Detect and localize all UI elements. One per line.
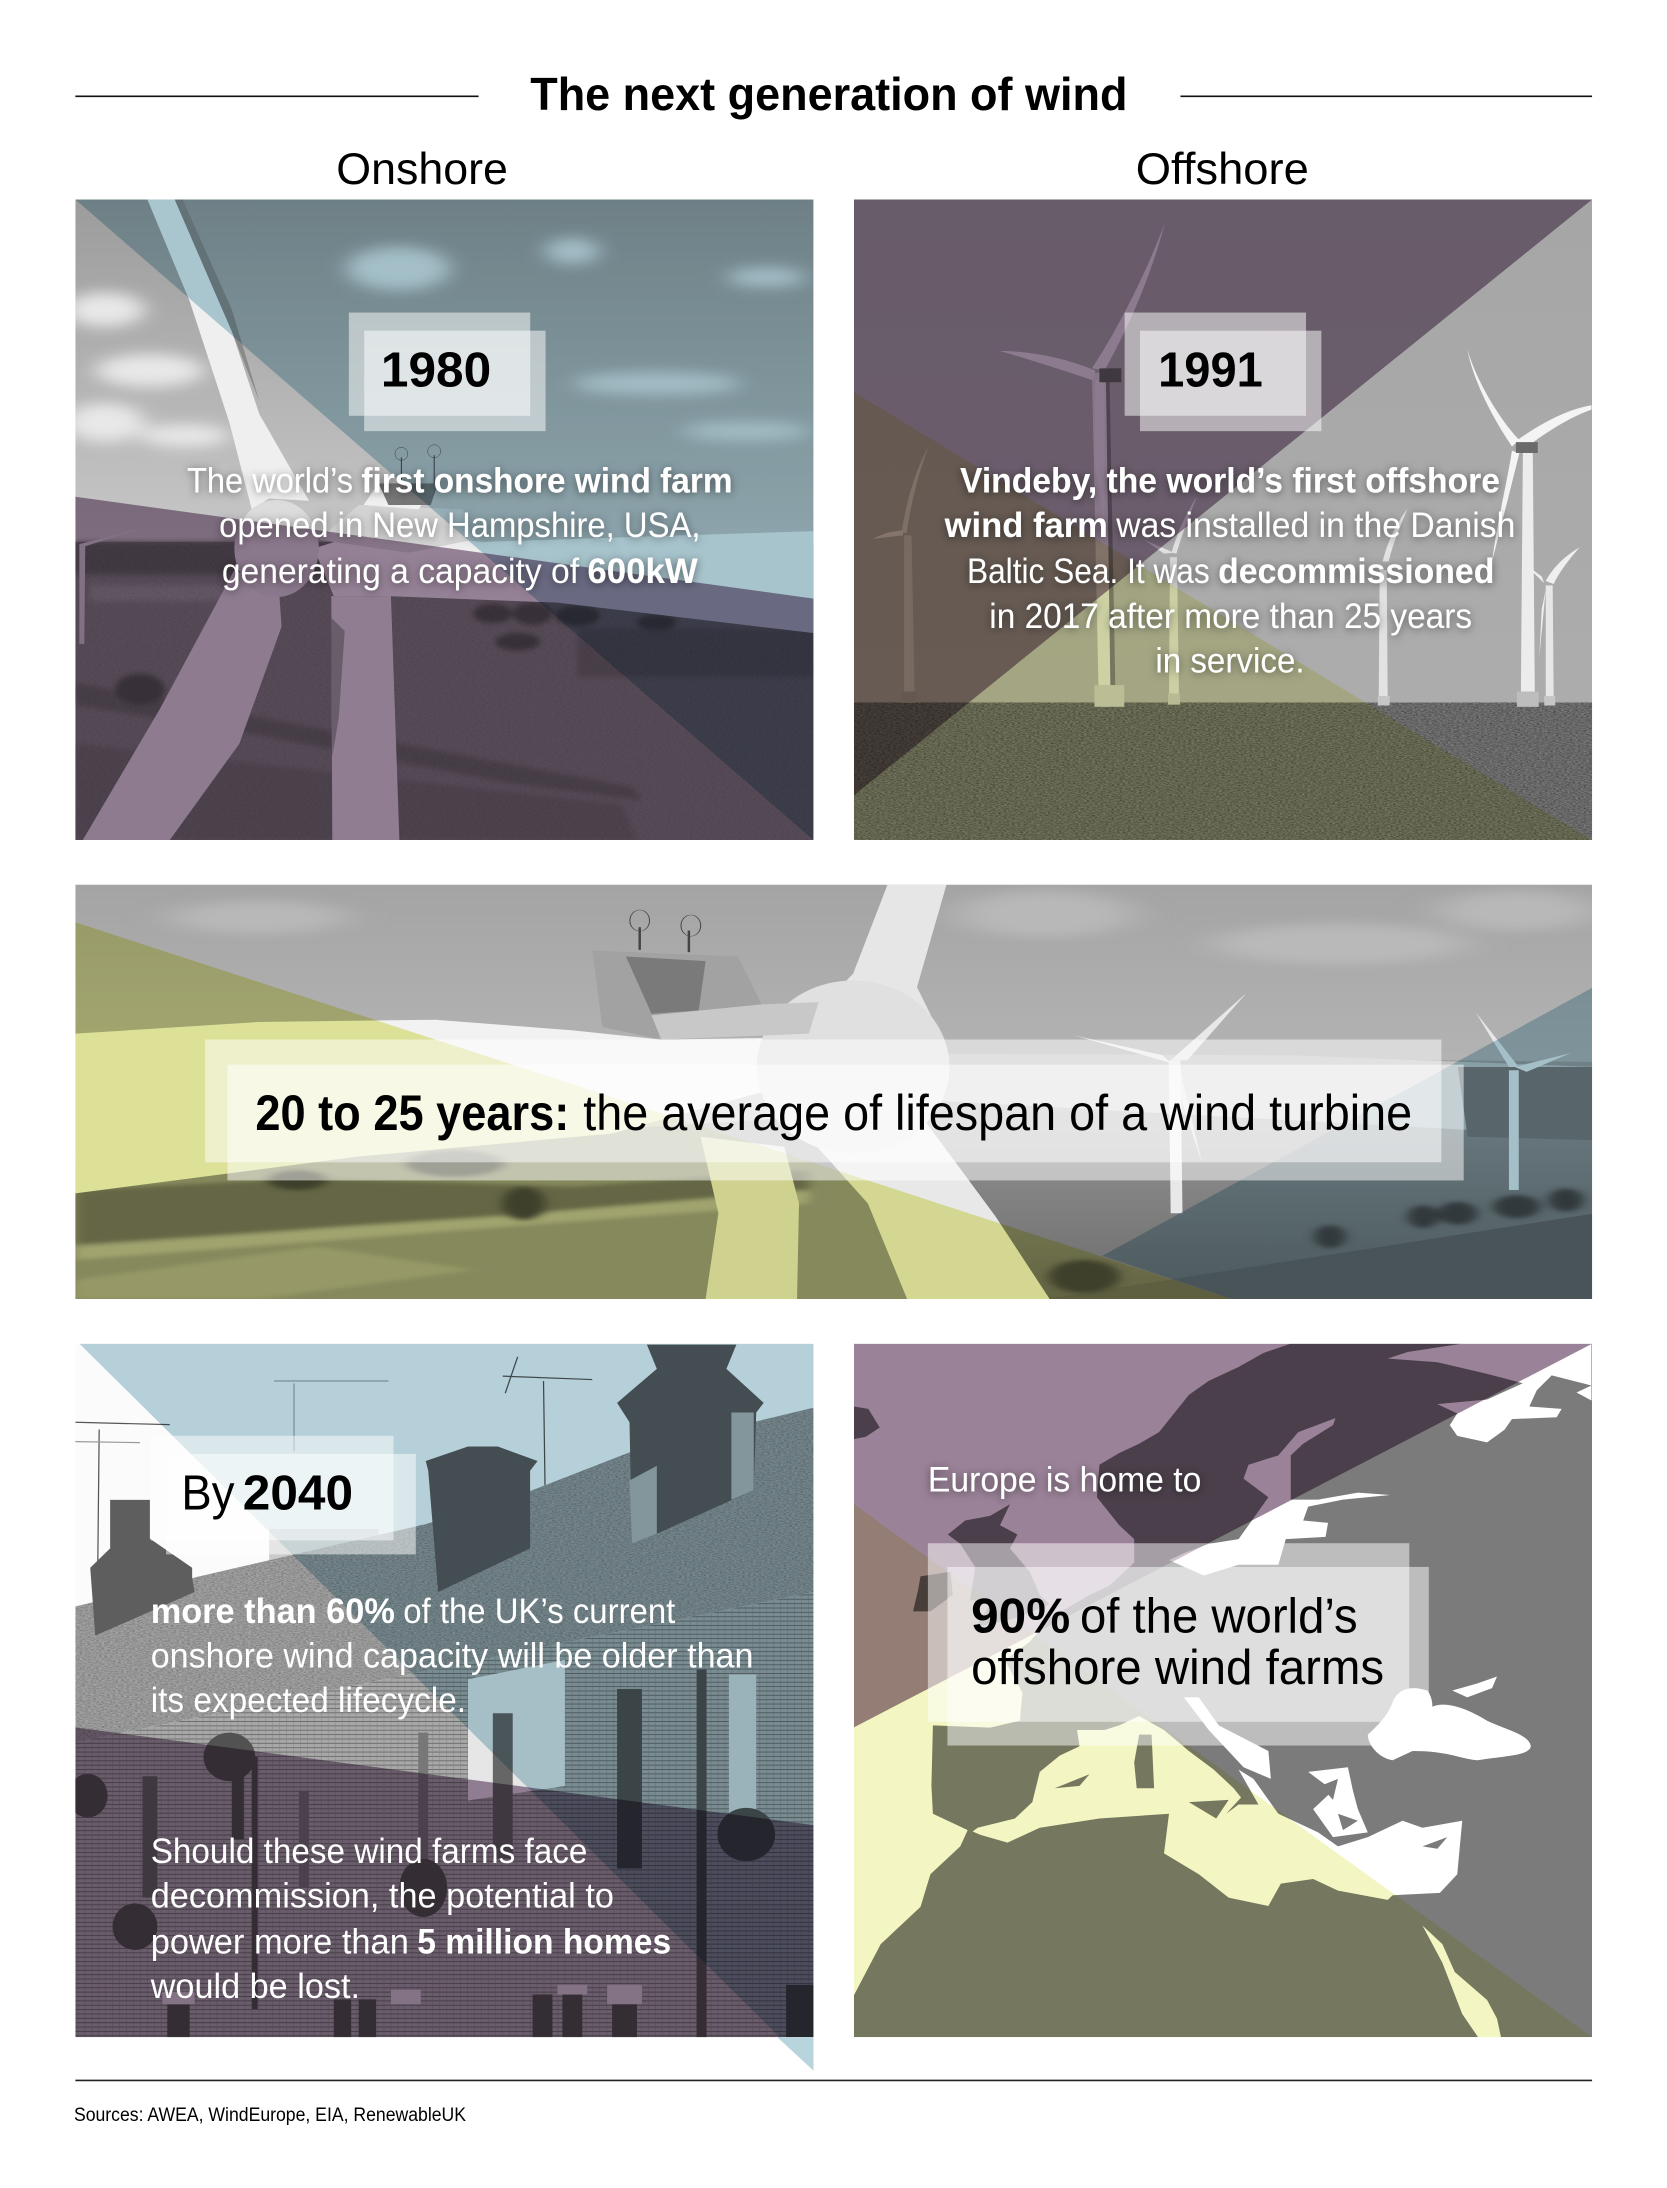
year box 1980 xyxy=(349,313,546,431)
text box: 90 percent: 90% xyxy=(971,1590,1070,1644)
year box by 2040: By xyxy=(181,1467,235,1521)
text: offshore fact: in service. xyxy=(1155,641,1305,681)
text: onshore fact: generating a capacity of xyxy=(222,551,579,591)
map: Europe with colour overlays xyxy=(854,1344,1592,2037)
panel: lifespan banner xyxy=(75,885,1595,1299)
photo: turbine close-up with colour overlays xyxy=(75,885,1595,1299)
text: capacity fact: more than 60% xyxy=(151,1591,395,1631)
text: offshore fact: was installed in the Danish xyxy=(1115,505,1515,545)
text: offshore fact xyxy=(944,461,1515,681)
text: homes fact: 5 million homes xyxy=(417,1921,671,1961)
title: The next generation of wind xyxy=(530,68,1127,120)
panel: by 2040 xyxy=(68,1344,813,2071)
year box 1980: 1980 xyxy=(381,344,491,398)
year box 1991: 1991 xyxy=(1158,344,1263,398)
text: Europe is home to: Europe is home to xyxy=(928,1460,1201,1500)
text: offshore fact: Baltic Sea. It was xyxy=(967,551,1210,591)
text box: lifespan: the average of lifespan of a wind turbine xyxy=(583,1085,1412,1141)
panel: offshore 1991 xyxy=(854,200,1592,841)
text: homes fact: decommission, the potential to xyxy=(151,1875,614,1915)
text box: 90 percent: of the world’s xyxy=(1080,1590,1358,1644)
sources: Sources: AWEA, WindEurope, EIA, RenewableUK xyxy=(74,2104,466,2126)
heading: Offshore: Offshore xyxy=(1136,145,1309,194)
panel: Europe map xyxy=(854,1344,1592,2037)
overlay: purple triangle xyxy=(854,200,1592,795)
text: homes fact: Should these wind farms face xyxy=(151,1831,587,1871)
overlay: yellow triangle xyxy=(854,1504,1592,2037)
year box by 2040: 2040 xyxy=(243,1467,353,1521)
text: onshore fact: The world’s xyxy=(187,461,353,501)
text: homes fact: would be lost. xyxy=(150,1966,360,2006)
text: onshore fact xyxy=(187,461,733,591)
panel: onshore 1980 xyxy=(65,200,813,846)
text: onshore fact: 600kW xyxy=(587,551,698,591)
heading: Onshore: Onshore xyxy=(336,145,508,194)
text box: 90 percent: offshore wind farms xyxy=(971,1641,1384,1695)
overlay: blue triangle xyxy=(75,200,813,840)
text box: lifespan xyxy=(205,1040,1464,1180)
text: offshore fact: wind farm xyxy=(944,505,1108,545)
text: offshore fact: Vindeby, the world’s first offshore xyxy=(960,461,1500,501)
text box: lifespan: 20 to 25 years: xyxy=(255,1085,569,1141)
overlay: blue triangle tail below photo xyxy=(777,2037,813,2071)
text box: 90 percent xyxy=(928,1543,1429,1746)
text: homes fact xyxy=(150,1831,671,2006)
text: onshore fact: opened in New Hampshire, USA, xyxy=(219,505,700,545)
text: homes fact: power more than xyxy=(151,1921,409,1961)
text: capacity fact: its expected lifecycle. xyxy=(151,1680,466,1720)
overlay: purple triangle xyxy=(854,1344,1592,1727)
year box 1991 xyxy=(1125,313,1321,431)
text: capacity fact xyxy=(151,1591,753,1720)
text: capacity fact: onshore wind capacity will be older than xyxy=(151,1635,753,1675)
photo: offshore turbines with colour overlays xyxy=(854,200,1592,841)
overlay: purple wedge xyxy=(75,1727,813,2037)
photo: onshore turbine with colour overlays xyxy=(65,200,813,846)
text: onshore fact: first onshore wind farm xyxy=(361,461,733,501)
year box by 2040 xyxy=(151,1436,416,1554)
photo: terraced houses with colour overlays xyxy=(68,1344,813,2071)
overlay: yellow triangle xyxy=(854,392,1592,840)
text: offshore fact: decommissioned xyxy=(1218,551,1494,591)
text: capacity fact: of the UK’s current xyxy=(403,1591,675,1631)
overlay: blue triangle xyxy=(80,1344,813,2071)
text: offshore fact: in 2017 after more than 25 years xyxy=(989,596,1472,636)
overlay: purple wedge xyxy=(75,497,813,840)
overlay: blue wedge xyxy=(1102,988,1592,1299)
overlay: yellow wedge xyxy=(75,922,1232,1299)
